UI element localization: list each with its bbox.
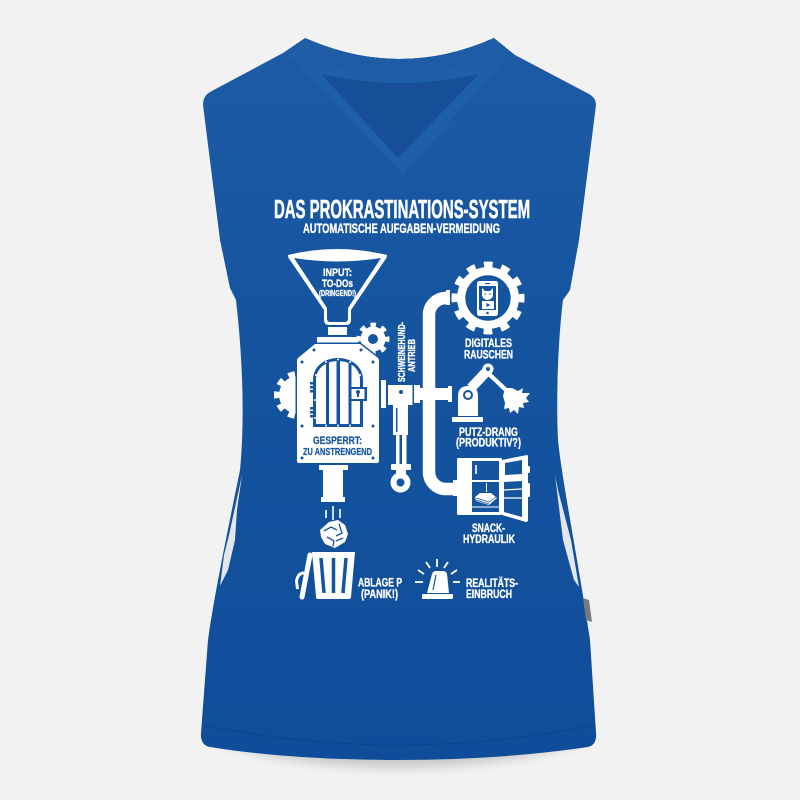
funnel label: TO-DOs bbox=[322, 278, 353, 290]
label: digitales rauschen: DIGITALES bbox=[465, 336, 512, 350]
label: realitaetseinbruch: REALITÄTS- bbox=[466, 575, 518, 590]
label: schweinehund-antrieb: SCHWEINEHUND- bbox=[396, 322, 408, 382]
fridge door bbox=[502, 455, 528, 522]
gear: left bbox=[278, 374, 318, 416]
label: snack-hydraulik bbox=[463, 521, 515, 546]
label: snack-hydraulik: HYDRAULIK bbox=[463, 532, 515, 546]
icon: robot arm with duster bbox=[452, 364, 530, 422]
funnel bbox=[288, 249, 387, 343]
phone bbox=[477, 281, 498, 316]
right side panel bbox=[555, 475, 579, 587]
label: digitales rauschen bbox=[464, 336, 513, 362]
funnel label: (DRINGEND!) bbox=[319, 288, 356, 298]
falling lines bbox=[326, 506, 340, 520]
label: putz-drang bbox=[456, 425, 521, 450]
outlet pipe bbox=[319, 465, 348, 502]
pipes bbox=[414, 290, 457, 496]
gear: top small bbox=[360, 326, 386, 352]
door label: GESPERRT: bbox=[313, 435, 362, 447]
label: realitaetseinbruch: EINBRUCH bbox=[466, 587, 512, 601]
inner neck bbox=[322, 75, 478, 158]
funnel label: INPUT: bbox=[323, 267, 352, 279]
label: putz-drang: PUTZ-DRANG bbox=[459, 425, 518, 439]
door lock bbox=[349, 387, 367, 401]
door with bars bbox=[310, 358, 363, 427]
infographic on sports top bbox=[200, 38, 596, 772]
label: putz-drang: (PRODUKTIV?) bbox=[456, 436, 521, 450]
title: DAS PROKRASTINATIONS-SYSTEM bbox=[274, 194, 530, 224]
duster bbox=[503, 388, 530, 414]
funnel label bbox=[319, 267, 356, 298]
icon: gear with phone bbox=[455, 265, 521, 331]
icon: crumpled paper bbox=[320, 520, 348, 548]
label: schweinehund-antrieb bbox=[396, 322, 418, 382]
icon: trash bin bbox=[296, 552, 355, 599]
icon: open fridge with sandwich bbox=[457, 455, 530, 522]
label: realitaetseinbruch bbox=[466, 575, 518, 601]
label: ablage p bbox=[358, 576, 402, 601]
label: schweinehund-antrieb: ANTRIEB bbox=[406, 339, 418, 372]
hydraulic cylinder bbox=[381, 380, 412, 492]
label: ablage p: (PANIK!) bbox=[361, 587, 398, 601]
subtitle: AUTOMATISCHE AUFGABEN-VERMEIDUNG bbox=[303, 221, 500, 236]
label: ablage p: ABLAGE P bbox=[358, 576, 402, 590]
label: digitales rauschen: RAUSCHEN bbox=[464, 348, 513, 362]
side tag bbox=[583, 598, 592, 622]
icon: siren bbox=[415, 559, 460, 599]
garment: sleeveless top bbox=[201, 38, 596, 768]
sandwich bbox=[475, 493, 497, 505]
rivets bbox=[300, 348, 374, 460]
machine body bbox=[297, 344, 379, 463]
door label bbox=[303, 435, 372, 458]
label: snack-hydraulik: SNACK- bbox=[472, 521, 505, 535]
left side panel bbox=[220, 475, 242, 586]
door label: ZU ANSTRENGEND bbox=[303, 446, 372, 458]
collar band bbox=[290, 38, 509, 175]
